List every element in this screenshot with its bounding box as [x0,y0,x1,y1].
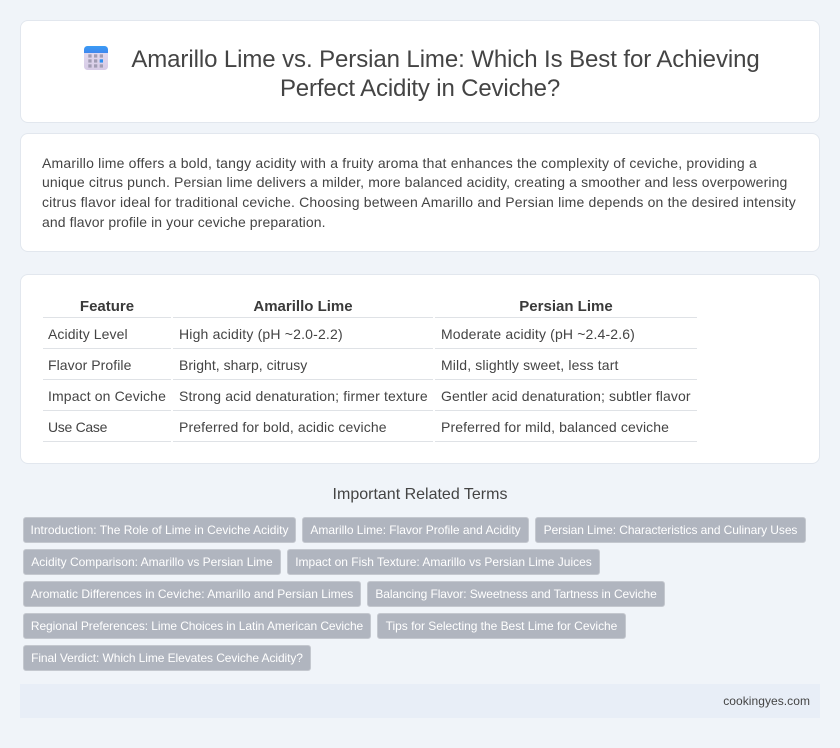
header panel [20,20,820,123]
title: Perfect Acidity in Ceviche? [280,75,560,102]
related terms chips: Amarillo Lime: Flavor Profile and Acidity [310,523,521,537]
intro paragraph: citrus flavor ideal for traditional ceviche. Choosing between Amarillo and Persian lime depends on the desired intensity [42,194,796,210]
comparison table: High acidity (pH ~2.0-2.2) [179,326,343,342]
icon: calendar [84,46,108,70]
related terms chips: Persian Lime: Characteristics and Culinary Uses [544,523,797,537]
title: Amarillo Lime vs. Persian Lime: Which Is Best for Achieving [131,46,760,73]
comparison table: Feature [80,298,134,315]
comparison table: Moderate acidity (pH ~2.4-2.6) [441,326,635,342]
comparison table: Bright, sharp, citrusy [179,357,307,373]
related terms chips: Tips for Selecting the Best Lime for Ceviche [386,619,617,633]
comparison table: Acidity Level [48,326,128,342]
comparison table: Mild, slightly sweet, less tart [441,357,619,373]
intro paragraph: unique citrus punch. Persian lime delivers a milder, more balanced acidity, creating a smoother and less overpowering [42,174,787,190]
intro text panel [20,133,820,252]
related terms chips: Introduction: The Role of Lime in Ceviche Acidity [31,523,288,537]
comparison table: Persian Lime [519,298,613,315]
related terms chips [23,517,806,671]
comparison table [43,298,697,442]
comparison table: Flavor Profile [48,357,131,373]
related terms chips: Regional Preferences: Lime Choices in Latin American Ceviche [31,619,363,633]
footer bar [20,684,820,718]
related terms heading: Important Related Terms [333,486,507,503]
comparison table: Use Case [48,419,107,435]
footer source: cookingyes.com [723,694,810,708]
intro paragraph: Amarillo lime offers a bold, tangy acidity with a fruity aroma that enhances the complexity of ceviche, providing a [42,155,757,171]
intro paragraph [42,155,796,230]
comparison table: Amarillo Lime [253,298,353,315]
related terms chips: Aromatic Differences in Ceviche: Amarillo and Persian Limes [31,587,353,601]
related terms chips: Acidity Comparison: Amarillo vs Persian Lime [31,555,273,569]
comparison table: Preferred for mild, balanced ceviche [441,419,669,435]
comparison table: Impact on Ceviche [48,388,166,404]
comparison table: Gentler acid denaturation; subtler flavor [441,388,691,404]
comparison table: Preferred for bold, acidic ceviche [179,419,387,435]
comparison table: Strong acid denaturation; firmer texture [179,388,428,404]
comparison table panel [20,274,820,464]
related terms chips: Balancing Flavor: Sweetness and Tartness in Ceviche [375,587,657,601]
title [131,46,760,102]
intro paragraph: and flavor profile in your ceviche preparation. [42,214,326,230]
related terms chips: Impact on Fish Texture: Amarillo vs Persian Lime Juices [295,555,592,569]
related terms chips: Final Verdict: Which Lime Elevates Ceviche Acidity? [31,651,303,665]
